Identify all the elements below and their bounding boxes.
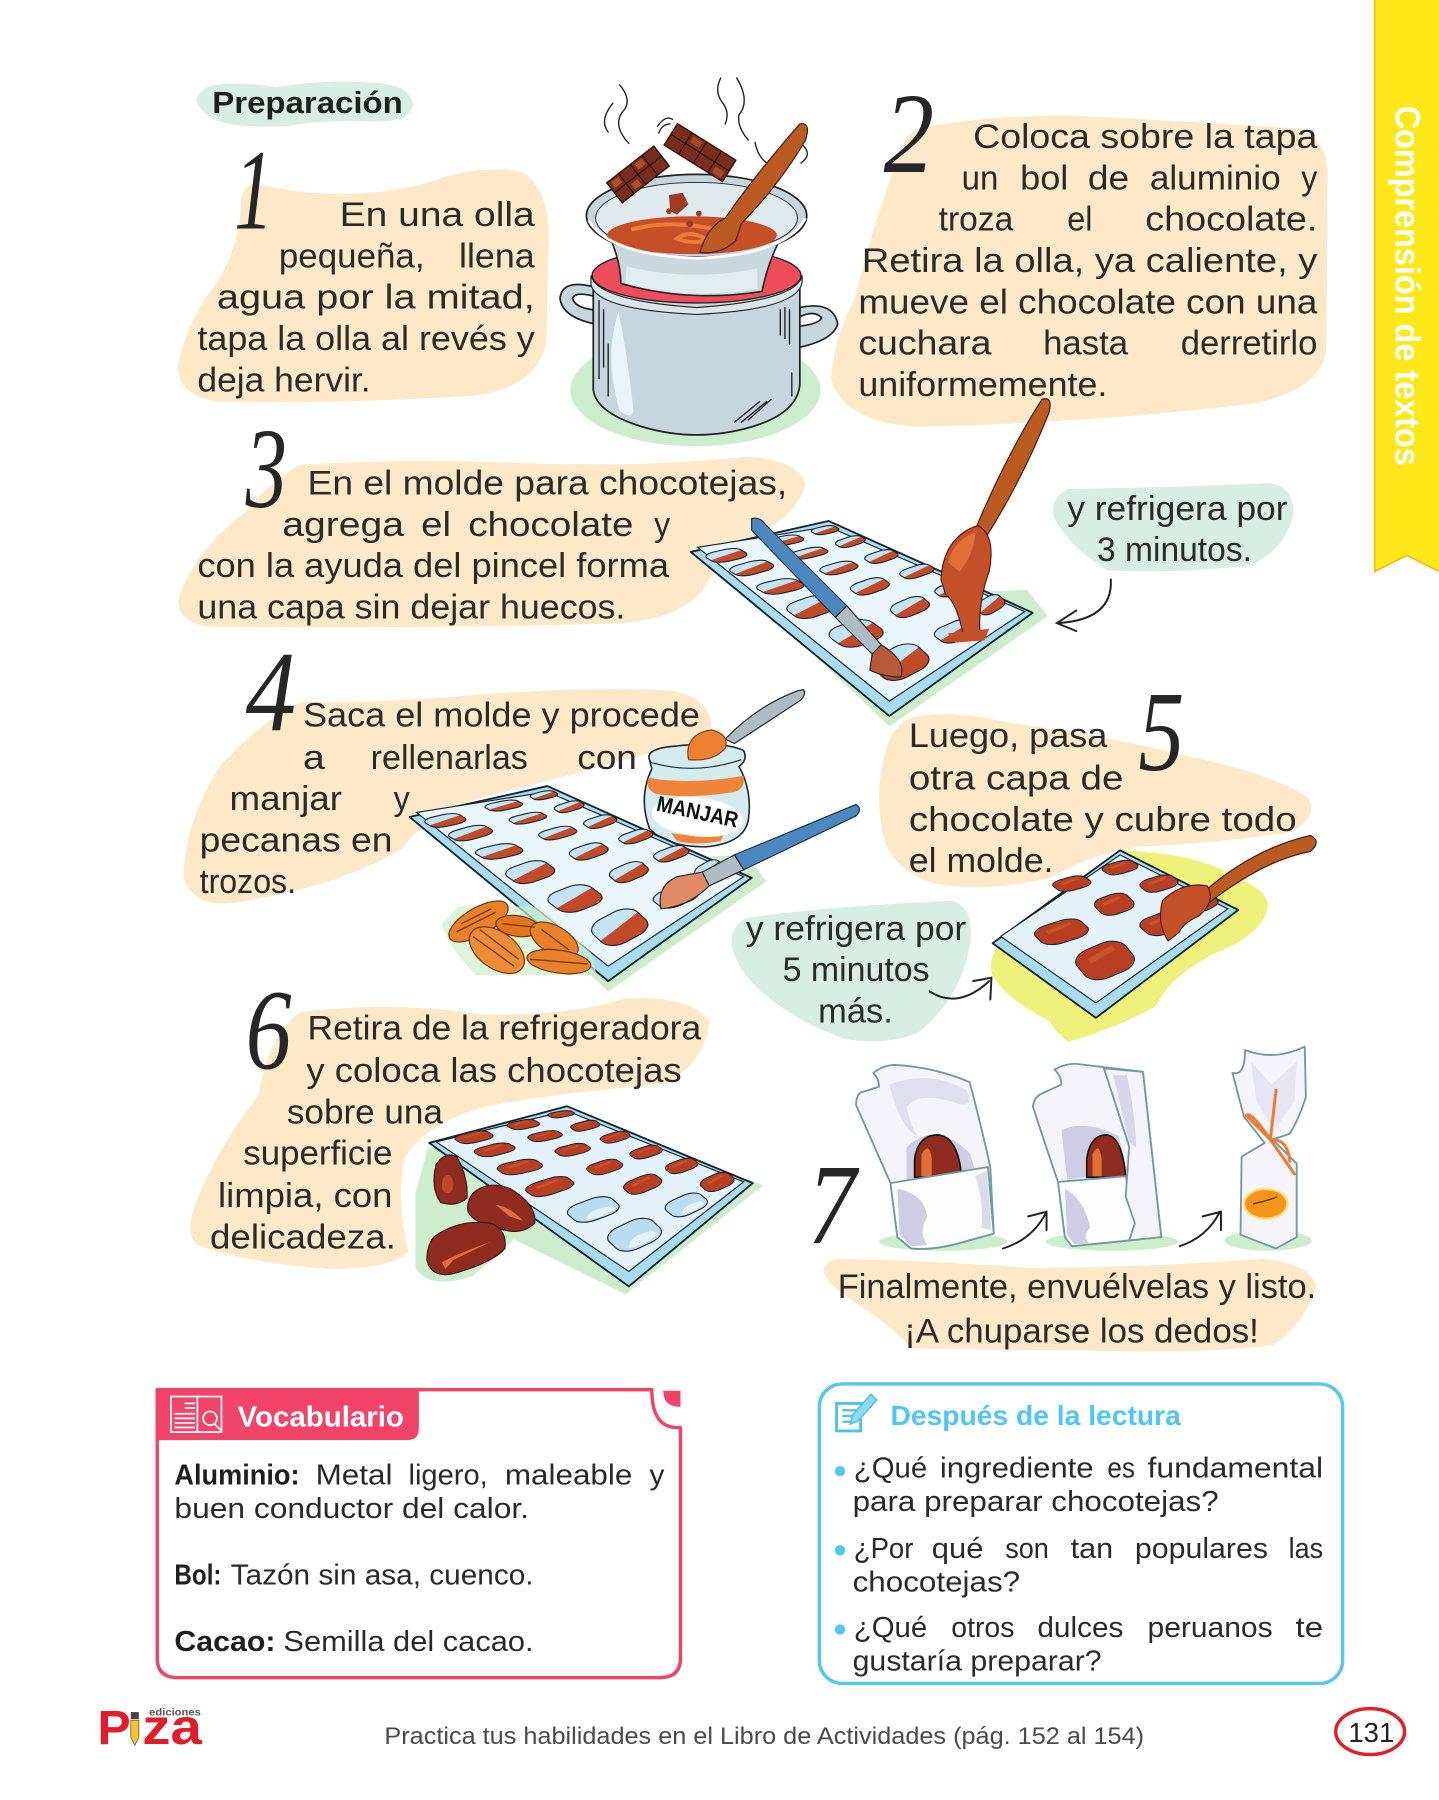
callout: refrigerate 5 minutes: 5 minutos: [783, 951, 929, 989]
step 4 text: manjar: [230, 780, 342, 818]
callout: refrigerate 3 minutes: 3 minutos.: [1097, 531, 1252, 569]
question 2: [835, 1533, 1323, 1598]
step 1 text: agua por la mitad,: [217, 279, 535, 317]
callout: refrigerate 5 minutes: y refrigera por: [746, 910, 966, 948]
step 2 text: aluminio: [1150, 159, 1281, 197]
logo: Piza ediciones: ediciones: [149, 1708, 201, 1719]
step 2 text: uniformemente.: [858, 366, 1107, 404]
step 1 background blob: [178, 169, 549, 402]
heading: Vocabulario: Vocabulario: [238, 1401, 404, 1433]
step 1 text: pequeña,: [279, 237, 425, 275]
logo: Piza ediciones: [98, 1698, 203, 1755]
step 2 text: Coloca sobre la tapa: [973, 118, 1318, 156]
question 2: ¿Por: [854, 1533, 914, 1565]
step 2 text: un: [962, 159, 998, 197]
question 1: [835, 1453, 1323, 1518]
step 1 text: En una olla: [340, 196, 536, 234]
step 7 text: ¡A chuparse los dedos!: [904, 1313, 1259, 1351]
question 3: dulces: [1037, 1612, 1123, 1644]
step 7 text: [838, 1268, 1316, 1351]
step 1 text: deja hervir.: [197, 361, 371, 399]
step 6 background blob: [190, 998, 709, 1269]
definition: Aluminio: Aluminio:: [174, 1460, 300, 1492]
step 6: unmould: [190, 966, 763, 1294]
step 3 text: chocolate: [468, 506, 633, 544]
step 4 text: trozos.: [200, 863, 296, 901]
icon: notepad with pencil: [837, 1394, 877, 1431]
definition: Aluminio: y: [650, 1460, 665, 1492]
question 3: te: [1296, 1612, 1323, 1644]
callout: refrigerate 5 minutes: más.: [818, 992, 893, 1030]
step 5 text: el molde.: [909, 842, 1053, 880]
step 5 text: Luego, pasa: [909, 717, 1108, 755]
brush: [660, 804, 859, 909]
step 3: brush chocolate in mould: [178, 399, 1293, 726]
numeral 3: 3: [245, 405, 287, 532]
step 2 text: de: [1088, 159, 1129, 197]
illustration: mould with brush and spoon: [691, 399, 1050, 726]
step 5 background blob: [879, 714, 1311, 887]
step 2 text: troza: [939, 201, 1014, 239]
illustration: jar of manjar: MANJAR: [655, 791, 741, 833]
arrow: wrapper 1 to 2: [1003, 1212, 1047, 1249]
step 6 text: limpia, con: [218, 1177, 392, 1215]
step 6 text: delicadeza.: [210, 1219, 396, 1257]
question 2: las: [1289, 1533, 1323, 1565]
step 4 background blob: [184, 689, 711, 904]
question 2: tan: [1071, 1533, 1113, 1565]
step 6 text: superficie: [243, 1135, 392, 1173]
definition: Bol: Bol:: [174, 1559, 221, 1591]
step 3 text: agrega: [282, 506, 405, 544]
arrow: to mould: [929, 978, 991, 999]
panel: Vocabulario: [156, 1388, 680, 1678]
step 6 text: [210, 1010, 702, 1257]
step 3 text: En el molde para chocotejas,: [308, 465, 787, 503]
illustration: covered mould on yellow: [991, 835, 1316, 1042]
step 4: fill with manjar and pecans: [184, 628, 859, 991]
step 3 text: con la ayuda del pincel forma: [197, 547, 670, 585]
step 2 text: cuchara: [858, 325, 992, 363]
arrow: wrapper 2 to 3: [1180, 1212, 1221, 1246]
question 2: chocotejas?: [853, 1566, 1020, 1598]
callout: refrigerate 5 minutes: [732, 901, 971, 1041]
step 7 text: Finalmente, envuélvelas y listo.: [838, 1268, 1316, 1306]
heading: Preparación: [197, 82, 413, 127]
step 3 background blob: [178, 457, 806, 627]
question 3: gustaría preparar?: [853, 1645, 1102, 1677]
step 7: wrap: [808, 1047, 1316, 1352]
step 1 text: tapa la olla al revés y: [197, 320, 536, 358]
numeral 5: 5: [1138, 668, 1184, 795]
illustration: pot with bowl of chocolate: [560, 78, 838, 446]
definition: Aluminio: buen conductor del calor.: [174, 1493, 529, 1525]
question 1: ingrediente: [940, 1453, 1094, 1485]
side ribbon: Comprensión de textos: Comprensión de textos: [1387, 106, 1427, 466]
step 6 text: Retira de la refrigeradora: [308, 1010, 702, 1048]
question 1: ¿Qué: [854, 1453, 927, 1485]
panel: Después de la lectura: [819, 1384, 1343, 1683]
step 6 text: sobre una: [287, 1093, 444, 1131]
question 1: fundamental: [1148, 1453, 1323, 1485]
numeral 4: 4: [246, 628, 296, 755]
header tab: [156, 1388, 419, 1440]
heading: Después de la lectura: Después de la lectura: [890, 1400, 1181, 1431]
logo: Piza ediciones: za: [142, 1698, 203, 1755]
callout: refrigerate 3 minutes: [1053, 483, 1293, 571]
numeral 1: 1: [234, 126, 273, 253]
definition: Cacao: Cacao:: [174, 1626, 275, 1658]
step 2 text: mueve el chocolate con una: [858, 283, 1318, 321]
chocotejas: [427, 1155, 535, 1275]
step 4 text: [200, 696, 700, 901]
definition: Bol: Tazón sin asa, cuenco.: [231, 1559, 534, 1591]
steam: [605, 78, 807, 163]
step 4 text: a: [303, 739, 326, 777]
step 4 text: pecanas en: [200, 821, 392, 859]
question 2: qué: [932, 1533, 983, 1565]
side ribbon: Comprensión de textos: [1375, 0, 1439, 571]
definition: Aluminio: [174, 1460, 665, 1525]
step 2 text: [858, 118, 1318, 404]
question 2: populares: [1135, 1533, 1268, 1565]
step 4 text: y: [394, 780, 410, 818]
question 1: es: [1107, 1453, 1135, 1485]
wrapper 2: [1033, 1064, 1161, 1246]
step 2 text: derretirlo: [1181, 325, 1317, 363]
step 4 text: con: [577, 739, 637, 777]
step 1: heat water: [178, 78, 838, 446]
numeral 2: 2: [884, 70, 934, 197]
illustration: jar of manjar: [644, 690, 805, 847]
definition: Aluminio: maleable: [505, 1460, 632, 1492]
question 1: para preparar chocotejas?: [853, 1486, 1219, 1518]
wooden spoon: [700, 124, 807, 253]
definition: Cacao: [174, 1626, 534, 1658]
heading: Preparación: Preparación: [212, 85, 403, 120]
illustration: mould: [410, 786, 767, 991]
step 1 text: [197, 196, 536, 399]
wrapper 3 with ribbon and sticker: [1232, 1047, 1306, 1249]
spoon with chocolate: [941, 399, 1050, 643]
step 3 text: [197, 465, 787, 627]
step 5 text: otra capa de: [909, 759, 1123, 797]
numeral 7: 7: [808, 1141, 860, 1268]
step 5 text: chocolate y cubre todo: [909, 801, 1297, 839]
icon: dictionary with magnifier: [171, 1397, 221, 1432]
step 2 text: chocolate.: [1145, 201, 1317, 239]
wrapper 1: [856, 1065, 994, 1249]
question 3: [835, 1612, 1323, 1677]
brush: [752, 518, 902, 677]
step 4 text: rellenarlas: [371, 739, 528, 777]
arrow: to mould: [1057, 579, 1111, 631]
step 2 text: bol: [1020, 159, 1068, 197]
step 2 text: Retira la olla, ya caliente, y: [862, 242, 1318, 280]
step 5 text: [909, 717, 1297, 880]
numeral 6: 6: [246, 966, 291, 1093]
illustration: mould with chocotejas: [415, 1106, 763, 1294]
step 2 text: hasta: [1043, 325, 1129, 363]
step 2 text: el: [1067, 201, 1092, 239]
page number: 131: [1348, 1717, 1394, 1748]
step 6 text: y coloca las chocotejas: [306, 1052, 682, 1090]
question 3: ¿Qué: [854, 1612, 927, 1644]
step 1 text: llena: [459, 237, 536, 275]
step 5: second layer: [732, 668, 1316, 1042]
question 3: peruanos: [1148, 1612, 1273, 1644]
definition: Aluminio: ligero,: [409, 1460, 488, 1492]
step 4 text: Saca el molde y procede: [303, 696, 700, 734]
spoon: [1200, 835, 1316, 904]
pecans: [442, 893, 597, 983]
step 3 text: y: [654, 506, 671, 544]
footer note: Practica tus habilidades en el Libro de Actividades (pág. 152 al 154): [384, 1723, 1144, 1750]
logo: Piza ediciones: P: [98, 1701, 131, 1755]
page number: [1336, 1709, 1405, 1755]
step 3 text: una capa sin dejar huecos.: [197, 589, 625, 627]
chocolate pieces: [607, 124, 736, 227]
step 3 text: el: [421, 506, 451, 544]
definition: Cacao: Semilla del cacao.: [283, 1626, 534, 1658]
question 3: otros: [951, 1612, 1014, 1644]
step 2: melt chocolate: [831, 70, 1328, 427]
illustration: wrapping steps: [856, 1047, 1312, 1251]
step 2 background blob: [831, 116, 1328, 427]
step 2 text: y: [1301, 159, 1318, 197]
question 2: son: [1005, 1533, 1049, 1565]
callout: refrigerate 3 minutes: y refrigera por: [1067, 490, 1288, 528]
definition: Aluminio: Metal: [316, 1460, 392, 1492]
step 7 background blob: [824, 1259, 1316, 1352]
